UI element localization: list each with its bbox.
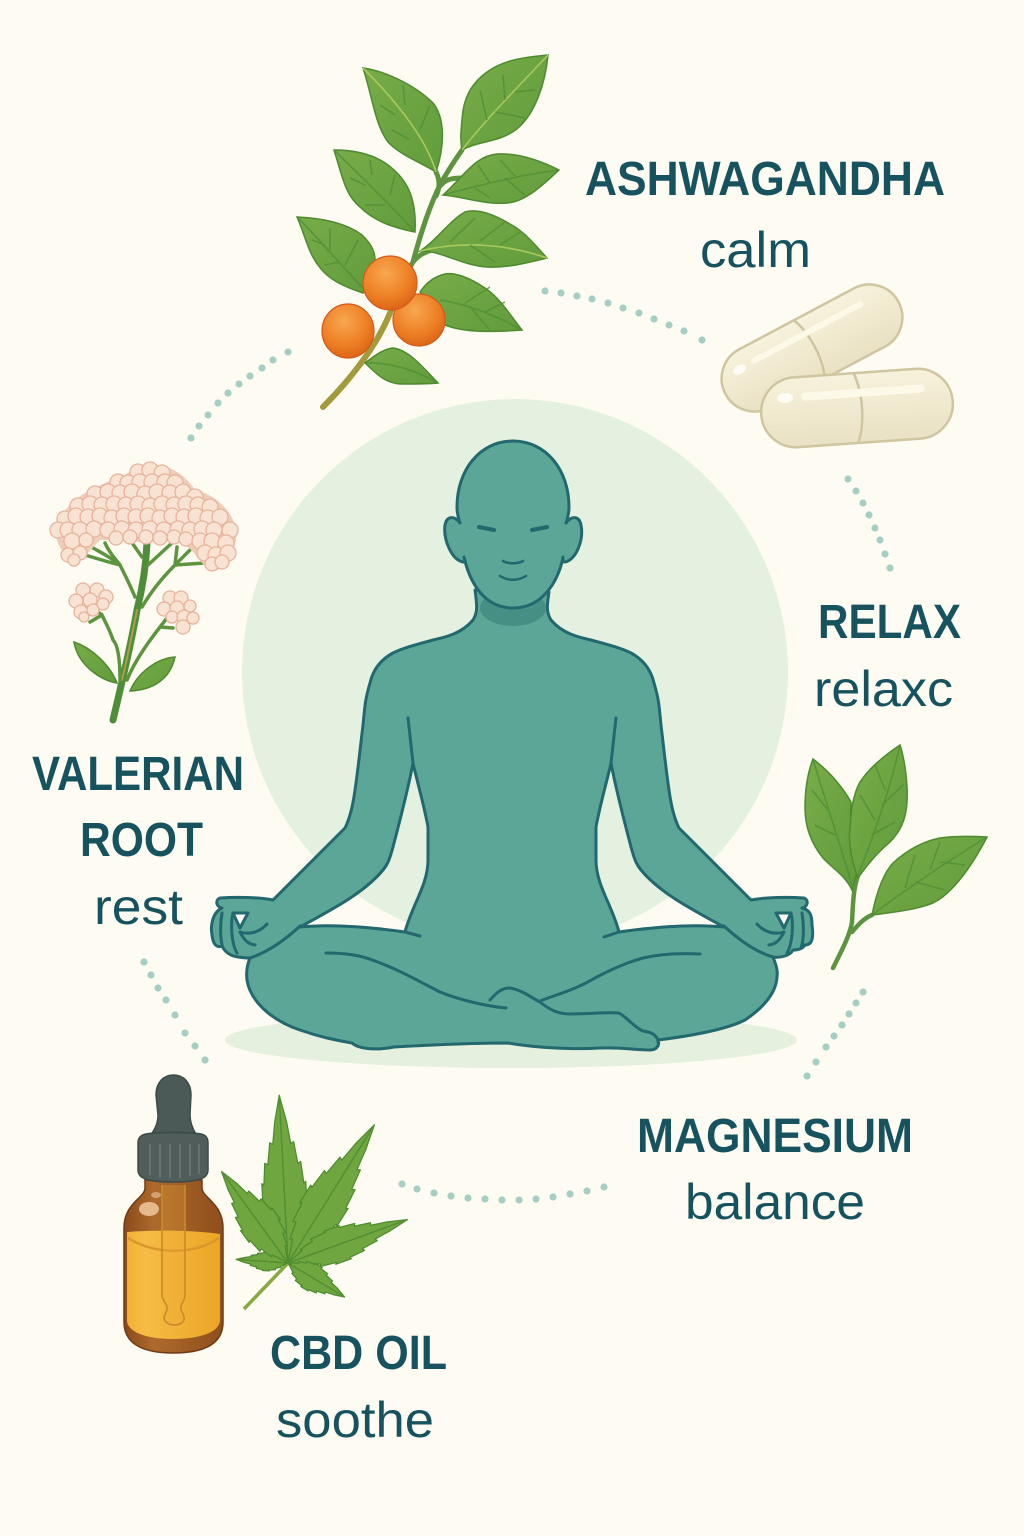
contour lines [221, 718, 803, 1042]
label: magnesium [637, 1110, 913, 1230]
stalk [244, 1263, 288, 1309]
meditating figure [211, 441, 813, 1050]
stem [390, 150, 462, 313]
icon: two white capsules [710, 273, 955, 450]
label: valerian root: rest [94, 879, 183, 935]
oil surface [128, 1238, 219, 1251]
label: valerian root [32, 748, 244, 935]
highlights [139, 1202, 159, 1216]
leaf right [872, 836, 987, 915]
ribbed cap [138, 1132, 208, 1182]
icon: cannabis leaf [206, 1094, 413, 1309]
flower head main [50, 462, 238, 571]
stem leaves [74, 642, 117, 683]
label: ashwagandha: ASHWAGANDHA [585, 153, 945, 206]
rubber bulb [150, 1075, 197, 1136]
stems [85, 540, 205, 720]
leaflets [257, 1094, 310, 1264]
bottle body [124, 1180, 223, 1353]
label: ashwagandha: calm [700, 222, 811, 278]
label: magnesium: balance [685, 1174, 865, 1230]
icon: valerian flower [50, 462, 238, 720]
icon: magnesium green leaves [805, 745, 987, 968]
halo circle behind figure [242, 399, 788, 945]
small flower left [69, 583, 113, 622]
leaves [297, 55, 559, 384]
icon: ashwagandha branch with orange berries [297, 55, 559, 407]
dotted ring connecting the items [140, 287, 894, 1204]
neck shadow [480, 590, 546, 626]
label: relax [814, 596, 961, 717]
figure body [211, 590, 813, 1050]
figure head [445, 441, 582, 608]
leaf middle [849, 745, 907, 878]
label: cbd oil: soothe [276, 1392, 434, 1448]
label: valerian root: ROOT [80, 814, 203, 867]
berries [322, 256, 445, 358]
stem [833, 875, 872, 968]
face [479, 527, 547, 580]
leaf left [805, 759, 858, 890]
label: cbd oil [270, 1327, 447, 1448]
small flower right [157, 591, 199, 634]
capsule back [710, 273, 914, 423]
label: cbd oil: CBD OIL [270, 1327, 447, 1380]
dropper pipe [162, 1185, 185, 1325]
oil [127, 1231, 220, 1339]
label: relax: relaxc [814, 661, 953, 717]
ground shadow [225, 1012, 797, 1068]
label: relax: RELAX [818, 596, 961, 649]
label: valerian root: VALERIAN [32, 748, 244, 801]
capsule front [759, 366, 955, 450]
icon: cbd oil dropper bottle [124, 1075, 223, 1353]
flower blob shading [56, 465, 237, 571]
label: magnesium: MAGNESIUM [637, 1110, 913, 1163]
label: ashwagandha [585, 153, 945, 278]
